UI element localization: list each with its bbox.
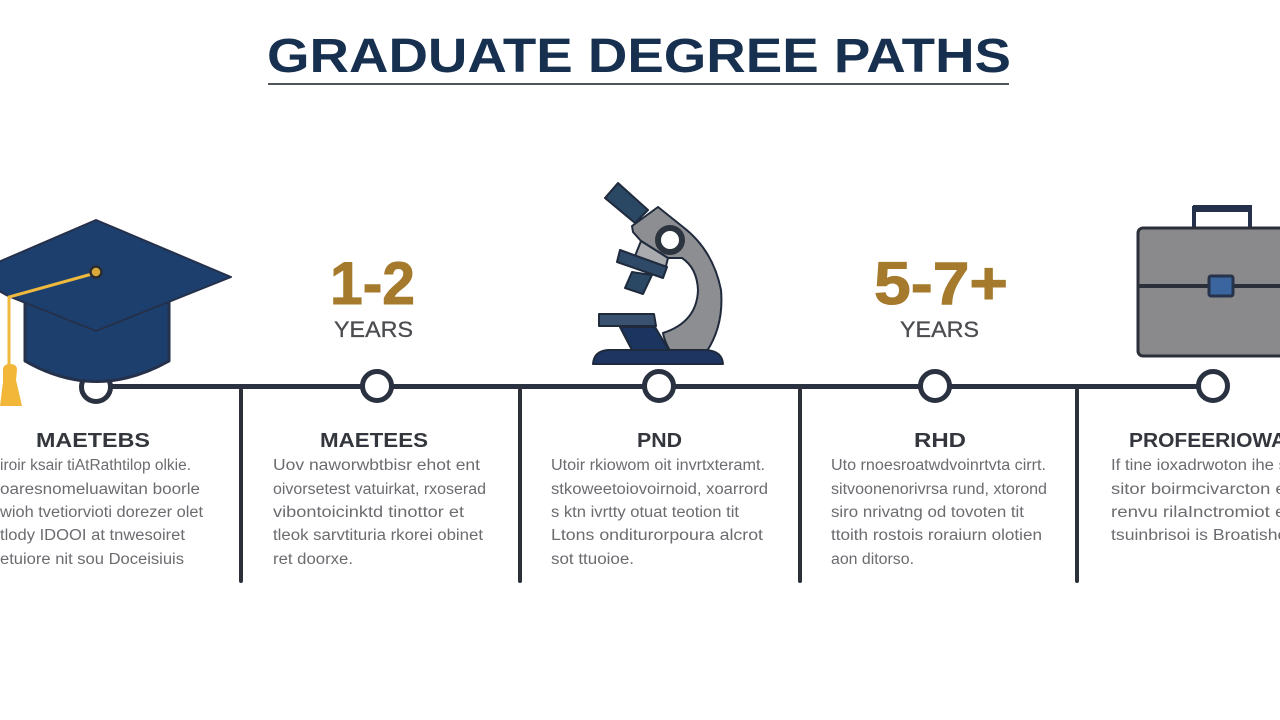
column: masters 2 <box>273 430 486 568</box>
column: PhD 2 <box>831 430 1047 568</box>
title: GRADUATE DEGREE PATHS <box>267 30 1011 83</box>
column: masters 1: oaresnomeluawitan boorle <box>0 481 200 498</box>
column: PhD 2: ttoith rostois roraiurn olotien <box>831 527 1042 544</box>
column: PhD 2: siro nrivatng od tovoten tit <box>831 504 1025 521</box>
column: PhD 2: Uto rnoesroatwdvoinrtvta cirrt. <box>831 457 1046 474</box>
column: PhD 1 <box>551 430 768 568</box>
column: PhD 2: aon ditorso. <box>831 551 914 568</box>
column: masters 2: vibontoicinktd tinottor et <box>273 504 465 521</box>
column: PhD 1: s ktn ivrtty otuat teotion tit <box>551 504 740 521</box>
timeline <box>82 372 1228 583</box>
column: masters 2: MAETEES <box>320 430 428 452</box>
column: PhD 1: Utoir rkiowom oit invrtxteramt. <box>551 457 765 474</box>
icon: briefcase <box>1138 205 1280 356</box>
icon: graduation cap <box>0 220 231 406</box>
stat: 1-2 years: 1-2 <box>330 250 415 317</box>
column: PhD 1: PND <box>637 430 682 452</box>
stat: 5-7+ years: 5-7+ <box>874 250 1008 317</box>
column: professional: tsuinbrisoi is Broatisho z <box>1111 527 1280 544</box>
column: PhD 1: sot ttuoioe. <box>551 551 634 568</box>
stat: 5-7+ years <box>874 250 1008 342</box>
column: masters 2: ret doorxe. <box>273 551 353 568</box>
column: PhD 1: Ltons onditurorpoura alcrot <box>551 527 764 544</box>
column: masters 2: tleok sarvtituria rkorei obinet <box>273 527 484 544</box>
column: masters 1 <box>0 430 204 568</box>
column: masters 1: tlody IDOOI at tnwesoiret <box>0 527 186 544</box>
stat: 5-7+ years: YEARS <box>900 317 979 342</box>
column: masters 1: etuiore nit sou Doceisiuis <box>0 551 184 568</box>
stat: 1-2 years: YEARS <box>334 317 413 342</box>
column: professional: renvu rilaInctromiot eat <box>1111 504 1280 521</box>
column: masters 1: MAETEBS <box>36 430 150 452</box>
column: professional: sitor boirmcivarcton etd <box>1111 481 1280 498</box>
column: masters 1: wioh tvetiorvioti dorezer olet <box>0 504 204 521</box>
column: masters 1: iroir ksair tiAtRathtilop olkie. <box>0 457 191 474</box>
column: PhD 2: sitvoonenorivrsa rund, xtorond <box>831 481 1047 498</box>
column: masters 2: oivorsetest vatuirkat, rxoserad <box>273 481 486 498</box>
column: professional <box>1111 430 1280 544</box>
icon: microscope <box>593 183 723 364</box>
column: masters 2: Uov naworwbtbisr ehot ent <box>273 457 481 474</box>
column: PhD 2: RHD <box>914 430 966 452</box>
column: PhD 1: stkoweetoiovoirnoid, xoarrord <box>551 481 768 498</box>
